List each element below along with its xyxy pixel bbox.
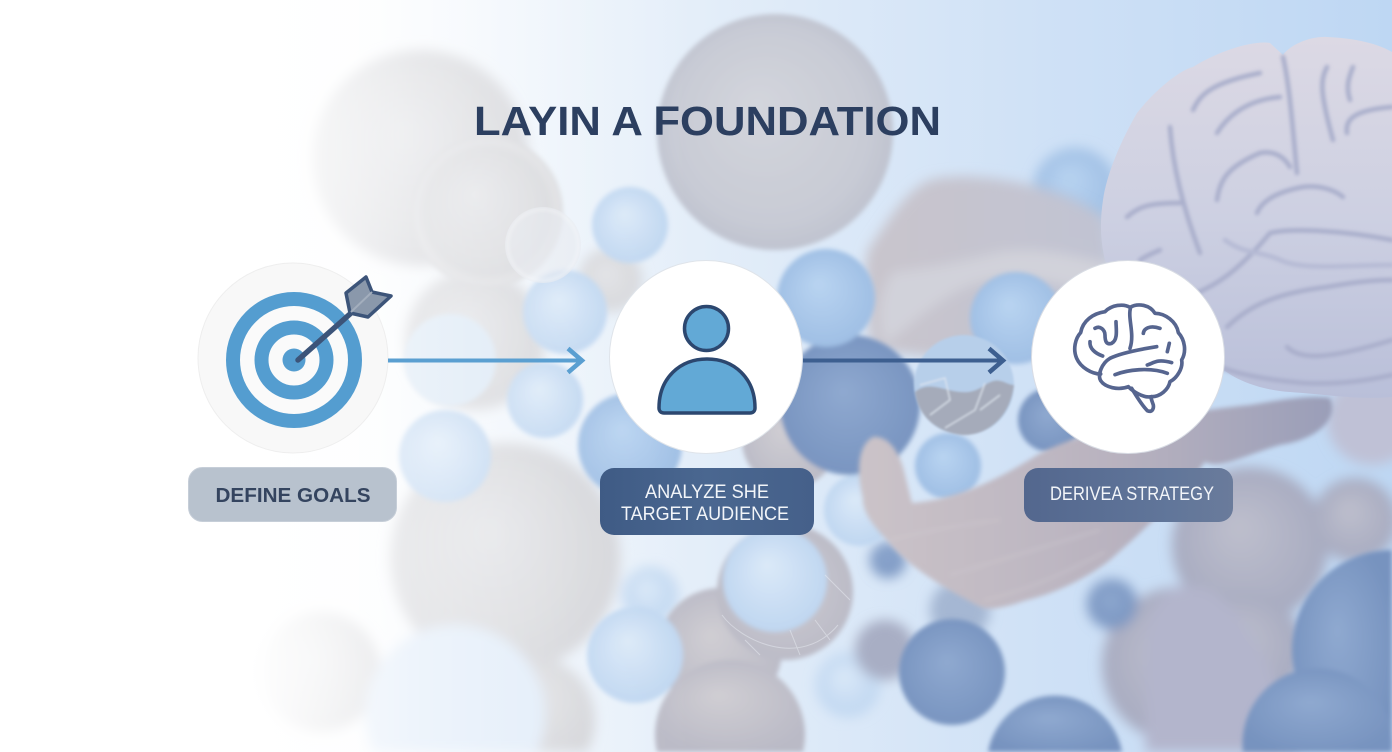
label: derivea strategy: DERIVEA STRATEGY — [1050, 484, 1214, 505]
icon: brain — [1032, 260, 1224, 454]
label: analyze she target audience: ANALYZE SHE — [645, 482, 769, 503]
label: define goals — [188, 468, 396, 522]
step 2: analyze the target audience — [600, 260, 814, 535]
arrow: step 2 to step 3 — [803, 348, 1003, 372]
arrow: step 1 to step 2 — [388, 348, 582, 372]
label: analyze she target audience: TARGET AUDIENCE — [621, 504, 789, 525]
title: LAYIN A FOUNDATION — [474, 98, 941, 144]
background: large brain — [1101, 37, 1392, 398]
background: lower hand — [859, 397, 1332, 609]
label: analyze she target audience — [600, 468, 814, 535]
background: far blurred spheres — [260, 50, 1392, 752]
background: upper hand — [865, 177, 1116, 360]
label: define goals: DEFINE GOALS — [216, 484, 370, 507]
icon: person — [610, 260, 802, 454]
step 1: define goals — [188, 263, 396, 522]
background: wire sphere lines — [722, 575, 850, 655]
background: globe sphere — [914, 335, 1014, 435]
icon: target with arrow — [198, 263, 391, 453]
step 3: derive a strategy — [1024, 260, 1233, 522]
background: translucent bubble — [505, 207, 581, 283]
label: derivea strategy — [1024, 468, 1233, 522]
background: near spheres — [399, 14, 1392, 752]
